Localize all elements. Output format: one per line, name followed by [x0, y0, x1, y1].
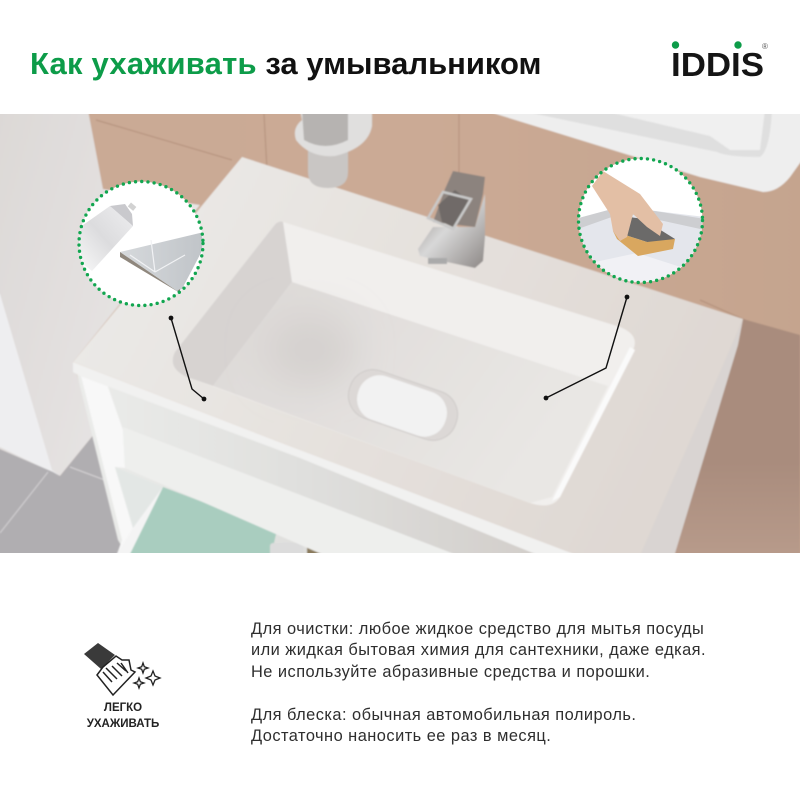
floor	[0, 433, 130, 560]
icon: easy care hand and sparkles	[84, 643, 162, 696]
side panel	[80, 372, 133, 560]
wall	[0, 110, 800, 560]
mirror inner	[517, 110, 772, 157]
text block: care instructions: Достаточно наносить ее раз в месяц.	[251, 727, 551, 745]
lower right wall	[665, 319, 800, 560]
text block: care instructions: Для очистки: любое жидкое средство для мытья посуды	[251, 620, 704, 638]
text block: care instructions: Не используйте абразивные средства и порошки.	[251, 662, 650, 680]
tile seams	[96, 114, 790, 340]
countertop front edge	[73, 362, 590, 560]
icon caption: УХАЖИВАТЬ	[87, 718, 159, 730]
icon caption	[86, 702, 159, 730]
mirror frame	[483, 110, 800, 192]
vanity band	[76, 370, 590, 560]
basin back wall	[173, 222, 635, 505]
small object	[270, 543, 303, 557]
text block: care instructions: или жидкая бытовая химия для сантехники, даже едкая.	[251, 641, 706, 659]
callout: hand with sponge	[575, 158, 705, 290]
countertop	[73, 157, 743, 560]
cup holder	[295, 110, 372, 188]
shelf front	[123, 427, 470, 560]
counter side	[636, 319, 743, 560]
text block: care instructions: Для блеска: обычная автомобильная полироль.	[251, 706, 636, 724]
title: Как ухаживать за умывальником	[30, 46, 542, 81]
text block: care instructions	[251, 620, 706, 745]
icon caption: ЛЕГКО	[104, 702, 142, 714]
left cabinet	[0, 110, 200, 476]
faucet	[418, 171, 485, 268]
leader line right	[544, 295, 629, 400]
scene	[0, 110, 800, 560]
basin left wall	[173, 222, 292, 386]
leader line left	[169, 316, 206, 401]
callout: polish spray	[76, 182, 204, 306]
cabinet front	[0, 294, 60, 476]
logo: IDDIS: ®	[762, 42, 768, 51]
drain cap	[351, 369, 453, 443]
towel	[127, 487, 277, 560]
photo: washbasin	[0, 114, 800, 553]
basin floor	[213, 282, 608, 503]
drain rim	[342, 363, 464, 447]
floor shadow	[265, 314, 355, 386]
right wall highlight	[552, 347, 635, 501]
